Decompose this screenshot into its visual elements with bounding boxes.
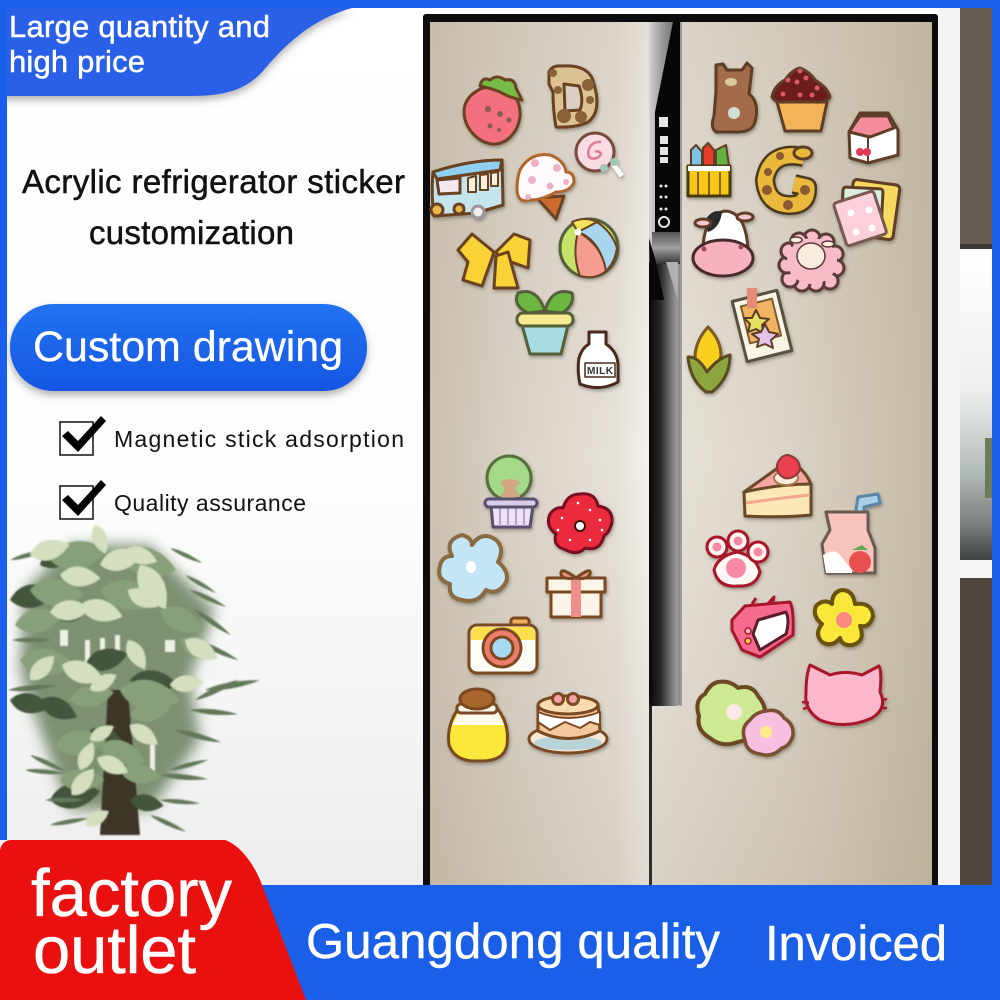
- sticker: green flower: [697, 682, 765, 744]
- heading: Acrylic refrigerator sticker: [22, 163, 405, 200]
- sticker: cake: [529, 694, 607, 753]
- display digits: [659, 117, 669, 227]
- fridge: [423, 14, 938, 894]
- sticker: lollipop: [576, 133, 622, 176]
- right door: [652, 22, 932, 888]
- door shading: [430, 22, 932, 888]
- sticker: bus: [431, 160, 503, 218]
- factory outlet text: outlet: [33, 913, 196, 988]
- sticker: milk carton cherry: [849, 113, 898, 163]
- stickers: lower right door: [697, 455, 887, 755]
- control panel strip: [649, 22, 682, 706]
- feature: quality: Quality assurance: [114, 490, 306, 516]
- banner text: high price: [9, 44, 145, 79]
- sticker: strawberry: [464, 77, 522, 144]
- custom drawing pill: Custom drawing: [33, 323, 343, 371]
- sticker: milk: MILK: [587, 366, 614, 377]
- sticker: star note: [732, 288, 792, 362]
- sticker: blue flower: [439, 535, 507, 601]
- sticker: giraffe G outline: [762, 147, 812, 210]
- feature: quality: [60, 480, 306, 519]
- plant narrow fronds: [8, 546, 261, 834]
- sticker: plant pot: [516, 291, 573, 354]
- sticker: cupcake: [772, 68, 830, 131]
- sticker: tv: [732, 597, 793, 657]
- plant trunk: [100, 690, 140, 835]
- stickers: upper right door: [688, 63, 900, 392]
- sticker: sheep: [779, 230, 844, 291]
- sticker: ice cream: [517, 155, 574, 219]
- sticker: paw: [707, 531, 768, 586]
- sticker: beach ball: [560, 219, 618, 277]
- fridge frame: [423, 14, 938, 894]
- sticker: cards: [833, 179, 900, 246]
- sticker: gift: [547, 571, 605, 617]
- sticker: bow: [458, 234, 530, 288]
- feature: magnetic: Magnetic stick adsorption: [114, 426, 404, 452]
- sticker: milk: [578, 332, 618, 388]
- bottom blue bar: [250, 885, 1000, 1000]
- sticker: tree pot: [485, 456, 537, 527]
- sticker: cake slice: [744, 455, 811, 517]
- custom drawing pill: [10, 304, 367, 391]
- sticker: pencil box: [688, 143, 730, 196]
- red badge: [0, 840, 306, 1000]
- left door: [430, 22, 649, 888]
- plant light leaves: [24, 522, 222, 831]
- top left blue banner: [0, 8, 352, 96]
- plant: [8, 522, 261, 835]
- guangdong quality: Guangdong quality: [306, 915, 720, 969]
- sticker: corn: [688, 327, 730, 392]
- sticker: bear B: [712, 63, 757, 132]
- right side cabinet: [938, 8, 992, 888]
- stickers: upper left door: [431, 66, 622, 388]
- sticker: D: [549, 66, 597, 127]
- sticker: camera: [469, 618, 537, 673]
- sticker: cat head: [802, 665, 887, 725]
- feature: magnetic: [60, 416, 404, 455]
- heading: customization: [89, 214, 294, 251]
- plant mid leaves: [13, 536, 221, 791]
- sticker: pink flower: [743, 710, 793, 755]
- factory outlet text: factory: [31, 856, 232, 931]
- sticker: red flower: [548, 494, 612, 553]
- banner text: Large quantity and: [9, 9, 270, 44]
- sticker: juice box: [822, 494, 880, 573]
- invoiced: Invoiced: [765, 917, 947, 971]
- sticker: yellow flower: [815, 590, 873, 645]
- sticker: honey jar: [448, 689, 508, 761]
- plant dark leaves: [8, 539, 178, 814]
- plant soft core: [20, 545, 215, 810]
- sticker: cow: [693, 211, 753, 276]
- stickers: lower left door: [439, 456, 612, 761]
